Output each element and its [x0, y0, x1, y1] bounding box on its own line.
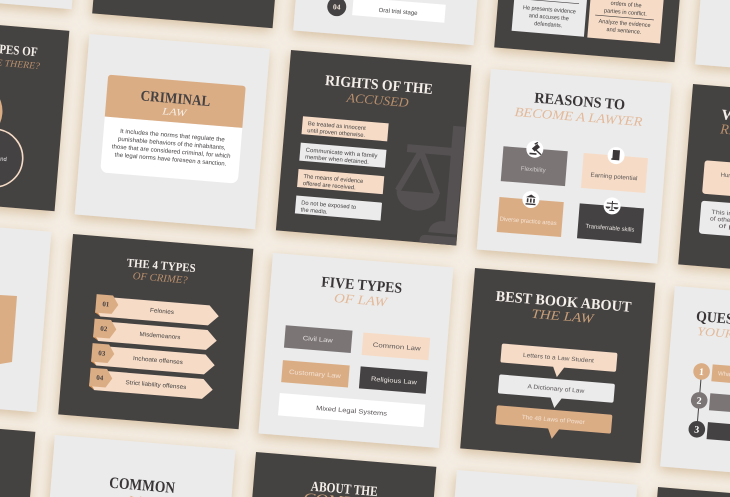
- title: THE 4 TYPES: [126, 256, 196, 275]
- speech bubble 3: The 48 Laws of Power: [522, 415, 585, 426]
- item: strict liability offenses: Strict liability offenses: [125, 380, 187, 391]
- title: [514, 89, 644, 129]
- title: FIVE TYPES: [321, 274, 403, 297]
- item: felonies: [95, 294, 220, 326]
- icon: number 04: 04: [333, 2, 341, 12]
- step 3: [688, 420, 730, 450]
- list item 1: until proven otherwise.: [307, 128, 366, 139]
- card: earning potential: Earning potential: [590, 173, 638, 182]
- title: LAW: [161, 106, 189, 119]
- step 1: 1: [699, 367, 704, 378]
- item: felonies: 01: [102, 300, 110, 309]
- panel: rights of the accused: [275, 50, 479, 252]
- speech bubble 1: [500, 343, 618, 382]
- item: strict liability offenses: 04: [96, 374, 104, 382]
- list item 1: Be treated as innocent: [308, 121, 366, 132]
- title: RIGHTS OF THE: [324, 73, 433, 98]
- list item 3: offered are received.: [303, 181, 356, 191]
- box: customary law: [281, 360, 350, 387]
- panel: common law: [40, 435, 235, 497]
- speech bubble 3: [494, 405, 612, 444]
- box: religious law: Religious Law: [371, 376, 418, 386]
- box: civil law: Civil Law: [302, 335, 333, 345]
- panel: about the: [241, 452, 436, 497]
- speech bubble 2: A Dictionary of Law: [527, 384, 585, 395]
- title: [125, 256, 196, 287]
- shape: tan block: [0, 295, 17, 364]
- item: misdemeanors: [93, 319, 218, 351]
- box: definition: [100, 75, 246, 184]
- text: definition: It includes the norms that regulate the: [120, 129, 226, 143]
- speech bubble 1: Letters to a Law Student: [523, 353, 594, 365]
- list item 2: [299, 143, 386, 168]
- box: judge role: and sentence.: [606, 27, 642, 36]
- box: civil law: [284, 325, 353, 353]
- title: [0, 34, 42, 72]
- list item 3: The means of evidence: [303, 174, 363, 185]
- box: common law: Common Law: [372, 342, 421, 353]
- box: accuser role: He presents evidence: [523, 5, 576, 15]
- box: mixed legal systems: Mixed Legal Systems: [316, 405, 387, 418]
- panel: bottom light card: [442, 470, 637, 497]
- list item 4: the media.: [300, 207, 328, 216]
- list item 4: Do not be exposed to: [301, 200, 356, 211]
- panel: bottom-left dark card: [0, 417, 35, 497]
- item: felonies: Felonies: [150, 308, 174, 316]
- title: REASONS TO: [534, 91, 626, 114]
- panel: questions for your lawyer: [660, 286, 730, 481]
- panel: top-right light card: [695, 0, 730, 79]
- box: accuser role: [512, 0, 589, 37]
- box: accuser role: and accuses the: [529, 13, 569, 22]
- box: judge role: [587, 0, 665, 43]
- box: description: [699, 201, 730, 245]
- panel: top-left light card: [0, 0, 86, 9]
- item: inchoate offenses: 03: [98, 349, 106, 358]
- text: definition: [111, 128, 232, 168]
- panel: five types of law: [258, 253, 453, 448]
- list item 4: [295, 195, 382, 221]
- step 2: 2: [696, 396, 702, 407]
- title: OF LAW: [334, 290, 389, 309]
- list item 2: Communicate with a family: [305, 148, 378, 160]
- card: flexibility: Flexibility: [520, 166, 546, 174]
- title: [494, 289, 632, 329]
- panel: best book about the law: [460, 268, 655, 463]
- step 2: [690, 391, 730, 421]
- card: diverse practice areas: Diverse practice areas: [499, 217, 557, 227]
- icon: scales: [605, 200, 619, 211]
- timeline connector: [697, 371, 702, 429]
- title: THE LAW: [531, 306, 595, 326]
- box: judge role: Analyze the evidence: [598, 19, 651, 29]
- panel: right dark card: [678, 84, 730, 279]
- panel: left light card: [0, 217, 51, 412]
- card: earning potential: [581, 145, 649, 193]
- box: mixed legal systems: [278, 393, 425, 427]
- title: BECOME A LAWYER: [514, 104, 643, 129]
- list item 3: [297, 169, 384, 194]
- panel: top dark card: [92, 0, 287, 28]
- text: definition: the legal norms have foreseen a sanction.: [114, 152, 227, 168]
- box: customary law: Customary Law: [289, 369, 342, 380]
- title: CRIMINAL: [140, 88, 211, 110]
- title: [694, 309, 730, 349]
- panel: trial stages card: [293, 0, 488, 45]
- panel: how many types of law: [0, 16, 69, 211]
- panel: bottom-right dark card: [643, 487, 730, 497]
- panel: roles card: [494, 0, 689, 62]
- card: transferrable skills: Transferrable skills: [585, 224, 634, 234]
- box: common law: [362, 333, 430, 360]
- circle: outlined: [0, 127, 25, 189]
- panel: criminal law: [75, 34, 270, 229]
- list item 1: [301, 116, 389, 141]
- box: human rights: [702, 160, 730, 205]
- icon: courthouse: [525, 194, 536, 205]
- step 3: 3: [694, 425, 700, 436]
- title: OF CRIME?: [132, 271, 189, 287]
- label: oral trial stage: [352, 0, 446, 23]
- item: misdemeanors: 02: [100, 325, 108, 333]
- title: ACCUSED: [345, 90, 410, 110]
- panel: reasons to become a lawyer: [477, 69, 671, 264]
- panel: the 4 types of crime: [58, 234, 253, 429]
- icon: gavel: [529, 141, 542, 155]
- title: [320, 274, 403, 310]
- title: [139, 88, 211, 121]
- item: strict liability offenses: [89, 368, 214, 400]
- step 1: [693, 363, 730, 392]
- box: judge role: parties in conflict.: [604, 8, 647, 18]
- box: accuser role: defendants.: [534, 21, 563, 29]
- speech bubble 2: [497, 374, 615, 413]
- text: definition: those that are considered criminal, for which: [112, 144, 231, 160]
- icon: document: [611, 150, 620, 160]
- item: inchoate offenses: [91, 343, 216, 375]
- icon: number 04: [327, 0, 347, 17]
- box: judge role: orders of the: [610, 1, 642, 9]
- title: [719, 107, 730, 143]
- card: transferrable skills: [577, 195, 645, 243]
- icon: scales watermark: [395, 126, 465, 246]
- item: misdemeanors: Misdemeanors: [139, 332, 181, 341]
- text: definition: punishable behaviors of the inhabitants,: [118, 137, 226, 152]
- label: oral trial stage: Oral trial stage: [378, 8, 418, 17]
- card: flexibility: [501, 138, 568, 186]
- card: diverse practice areas: [497, 189, 564, 237]
- title: BEST BOOK ABOUT: [495, 289, 632, 316]
- list item 2: member when detained.: [305, 155, 369, 166]
- circle: tan: [0, 79, 5, 144]
- box: religious law: [359, 366, 427, 394]
- item: inchoate offenses: Inchoate offenses: [133, 356, 183, 366]
- title: [323, 73, 433, 112]
